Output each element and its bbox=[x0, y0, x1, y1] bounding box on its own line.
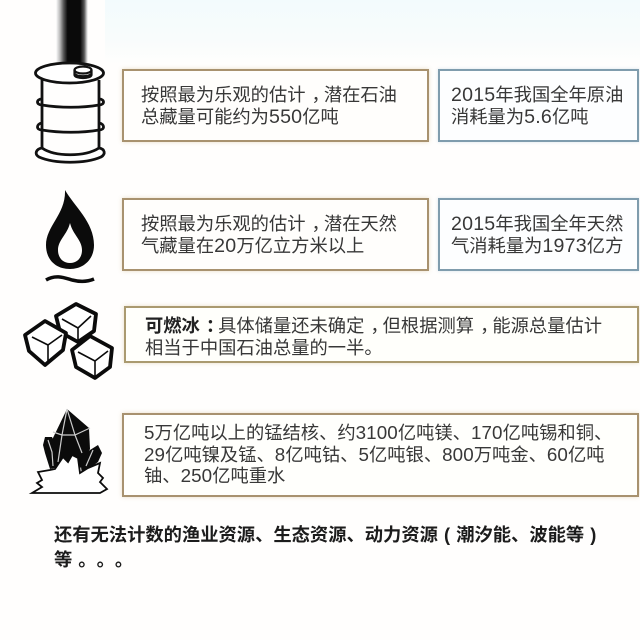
text: gas reserves bbox=[141, 213, 397, 257]
text: combustible ice: ： bbox=[206, 315, 224, 336]
text: oil consumption bbox=[451, 84, 623, 128]
panel: oil reserves bbox=[122, 69, 429, 142]
text: gas reserves: ， bbox=[312, 213, 330, 234]
text: oil reserves: 按照最为乐观的估计 潜在石油 bbox=[141, 84, 397, 105]
text: mineral resources: 29亿吨镍及锰、8亿吨钴、5亿吨银、800万吨金、60亿吨 bbox=[144, 444, 605, 465]
icon: ice cubes bbox=[23, 302, 114, 380]
text: oil reserves: 总藏量可能约为550亿吨 bbox=[141, 106, 339, 128]
text: gas consumption bbox=[451, 213, 623, 257]
icon: gas flame bbox=[45, 190, 95, 284]
closing note: ( bbox=[444, 524, 450, 545]
top background tint bbox=[105, 0, 640, 64]
text: gas reserves: 按照最为乐观的估计 潜在天然 bbox=[141, 213, 397, 234]
text: oil reserves: ， bbox=[312, 84, 330, 105]
closing note: 。 bbox=[97, 549, 115, 570]
text: combustible ice: ， bbox=[370, 315, 389, 336]
text: gas consumption: 2015年我国全年天然 bbox=[451, 213, 623, 235]
text: gas consumption: 气消耗量为1973亿方 bbox=[451, 235, 623, 257]
text: gas reserves: 气藏量在20万亿立方米以上 bbox=[141, 235, 364, 257]
panel: oil consumption bbox=[438, 69, 639, 142]
text: mineral resources: 铀、250亿吨重水 bbox=[144, 465, 285, 486]
text: mineral resources bbox=[144, 422, 612, 486]
oil pipe bbox=[56, 0, 88, 64]
panel: combustible ice bbox=[124, 306, 639, 363]
icon: oil barrel bbox=[34, 62, 106, 164]
text: oil reserves bbox=[141, 84, 397, 128]
text: oil consumption: 消耗量为5.6亿吨 bbox=[451, 106, 589, 128]
closing note: 。 bbox=[78, 549, 97, 570]
closing note: 等 bbox=[54, 549, 72, 570]
closing note: 还有无法计数的渔业资源、生态资源、动力资源 潮汐能、波能等 bbox=[54, 524, 584, 545]
icon: mineral crystals bbox=[28, 409, 108, 494]
text: mineral resources: 5万亿吨以上的锰结核、约3100亿吨镁、170亿吨锡和铜、 bbox=[144, 422, 612, 443]
text: combustible ice bbox=[145, 315, 602, 358]
text: combustible ice: 可燃冰 具体储量还未确定 但根据测算 能源总量估计 bbox=[145, 315, 602, 336]
closing note: 。 bbox=[115, 549, 133, 570]
text: oil consumption: 2015年我国全年原油 bbox=[451, 84, 623, 106]
text: combustible ice: 相当于中国石油总量的一半。 bbox=[145, 337, 383, 358]
closing note: ) bbox=[590, 524, 596, 545]
closing note bbox=[54, 524, 596, 570]
panel: mineral resources bbox=[122, 413, 639, 497]
text: combustible ice: ， bbox=[480, 315, 498, 336]
panel: gas reserves bbox=[122, 198, 429, 271]
panel: gas consumption bbox=[438, 198, 639, 271]
